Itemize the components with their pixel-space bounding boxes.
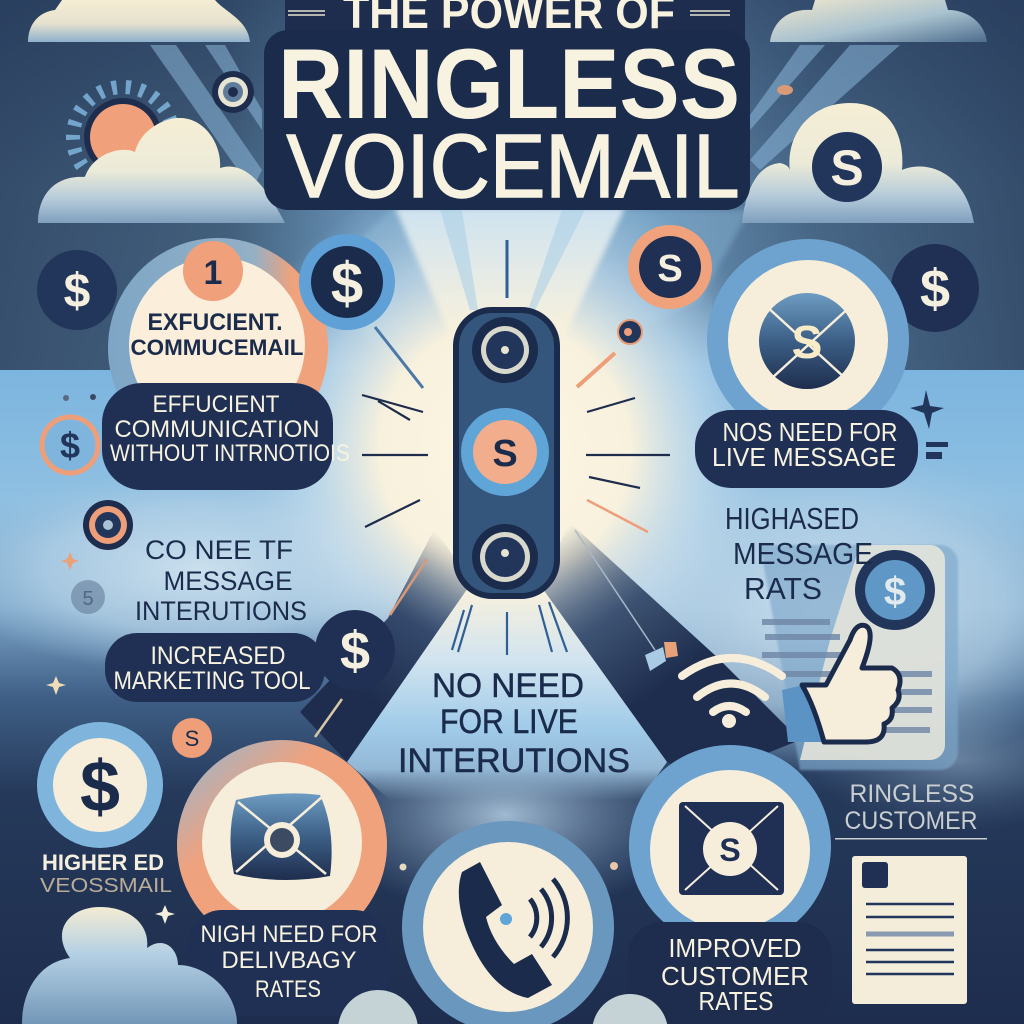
heading: ringless: RINGLESS <box>278 28 740 139</box>
cloud: bottom left <box>22 907 237 1024</box>
callout: no need for live message: LIVE MESSAGE <box>712 442 896 472</box>
device middle dollar <box>461 408 549 496</box>
icon: thumbs up <box>782 625 900 742</box>
icon: orange sparkle <box>61 552 79 570</box>
cloud: left <box>38 118 285 223</box>
panel: document with dollar <box>760 545 958 770</box>
icon: dollar bottom left large <box>37 722 163 848</box>
callout: high need delivery rates: NIGH NEED FOR <box>200 921 378 948</box>
icon: dollar orange ring top right: S <box>657 248 683 290</box>
cloud: right <box>742 103 974 223</box>
icon: small ring top left <box>212 71 254 113</box>
panel: document with dollar: $ <box>884 570 906 614</box>
text: ringless customer: CUSTOMER <box>844 807 978 835</box>
icon: dollar orange ring left <box>42 394 98 473</box>
cloud: bottom center right <box>592 994 668 1024</box>
cloud: top right <box>770 0 987 42</box>
text: ringless customer <box>835 780 987 840</box>
icon: dollar far left: $ <box>64 265 91 318</box>
text: ringless customer: RINGLESS <box>850 780 974 808</box>
label <box>130 309 304 360</box>
light triangle <box>347 585 667 800</box>
number badge: 1 <box>204 254 222 292</box>
phone device <box>456 310 557 596</box>
callout: no need for live message: NOS NEED FOR <box>722 417 898 447</box>
icon: small orange dollar: S <box>185 726 199 751</box>
text: no need message interruptions: MESSAGE <box>164 566 292 596</box>
icon: small arrow mark <box>645 642 678 671</box>
panel: envelope circle right: S <box>792 316 822 368</box>
callout: increased marketing tool <box>105 633 325 702</box>
icon: dollar center left <box>315 610 395 690</box>
icon: sparkle right <box>910 390 948 459</box>
icon: dollar on right cloud <box>812 132 882 202</box>
callout: no need for live message <box>695 410 918 488</box>
text: higher message rates: MESSAGE <box>733 536 873 571</box>
icon: small orange dollar <box>172 718 212 758</box>
text: no need for live interruptions: INTERUTIONS <box>398 742 630 780</box>
callout: increased marketing tool: MARKETING TOOL <box>114 667 311 695</box>
text: no need for live interruptions <box>398 667 630 780</box>
device middle dollar: S <box>492 433 518 475</box>
panel: phone circle bottom <box>402 821 614 1024</box>
icon: dollar far right: $ <box>920 259 950 319</box>
icon: dollar far right <box>891 244 979 332</box>
text: no need for live interruptions: FOR LIVE <box>440 703 578 741</box>
callout: efficient communication: EFFUCIENT <box>152 391 280 418</box>
central light rays <box>315 240 670 737</box>
icon: sparkle left <box>46 676 66 695</box>
dark wedge right <box>540 522 800 780</box>
label: COMMUCEMAIL <box>130 335 304 360</box>
callout: improved customer rates: RATES <box>698 986 774 1016</box>
heading: voicemail: VOICEMAIL <box>286 117 740 217</box>
callout: improved customer rates: CUSTOMER <box>661 961 809 991</box>
callout: efficient communication <box>102 383 350 490</box>
dot right of phone <box>610 862 618 870</box>
text: highered voicemail: HIGHER ED <box>42 850 164 875</box>
text: higher message rates <box>725 501 873 606</box>
device bottom lens <box>472 524 538 590</box>
text: higher message rates: RATS <box>744 571 822 606</box>
text: highered voicemail: VEOSSMAIL <box>40 875 172 897</box>
callout: improved customer rates <box>628 922 832 1024</box>
icon: wifi <box>682 658 782 726</box>
dark wedge left <box>300 528 472 762</box>
icon: orange ring left <box>83 500 133 550</box>
text: no need message interruptions: INTERUTIONS <box>135 596 307 626</box>
dot left of phone <box>400 864 406 870</box>
cloud: top left <box>28 0 250 42</box>
icon: faded ring left <box>71 580 105 614</box>
panel: efficient circle <box>108 238 328 458</box>
panel: envelope bottom left <box>177 740 387 950</box>
callout: efficient communication: COMMUNICATION <box>114 416 320 443</box>
icon: sparkle bottom <box>155 905 175 924</box>
icon: dollar orange ring top right <box>628 225 712 309</box>
callout: high need delivery rates: DELIVBAGY <box>222 947 356 974</box>
panel: envelope bottom right <box>629 745 831 947</box>
title block <box>264 0 750 217</box>
icon: orange pin <box>618 320 642 344</box>
icon: sun with rays <box>73 87 173 187</box>
label: EXFUCIENT. <box>148 309 282 336</box>
callout: efficient communication: WITHOUT INTRNOTIOIS <box>110 440 350 467</box>
icon: faded ring left: 5 <box>82 588 94 610</box>
panel: envelope circle right <box>707 239 909 441</box>
callout: increased marketing tool: INCREASED <box>150 642 286 670</box>
device top lens <box>472 317 538 383</box>
text: no need message interruptions: CO NEE TF <box>145 535 293 565</box>
callout: high need delivery rates: RATES <box>255 976 321 1003</box>
callout: improved customer rates: IMPROVED <box>668 933 802 963</box>
text: higher message rates: HIGHASED <box>725 501 859 536</box>
icon: small orange mark <box>777 85 793 95</box>
cloud: bottom center left <box>338 990 418 1024</box>
callout: high need delivery rates <box>188 910 388 1016</box>
text: no need message interruptions <box>135 535 307 626</box>
icon: dollar far left <box>37 250 117 330</box>
icon: dollar on right cloud: S <box>830 140 864 196</box>
panel: envelope bottom right: S <box>719 832 741 868</box>
icon: document bottom right <box>852 856 967 1004</box>
number badge <box>183 241 243 301</box>
icon: dollar top left center: $ <box>331 251 363 316</box>
icon: dollar bottom left large: $ <box>80 747 120 827</box>
icon: dollar center left: $ <box>340 621 370 681</box>
icon: dollar orange ring left: $ <box>60 425 80 466</box>
icon: dollar top left center <box>299 234 395 330</box>
text: highered voicemail <box>40 850 172 897</box>
text: no need for live interruptions: NO NEED <box>432 667 584 705</box>
